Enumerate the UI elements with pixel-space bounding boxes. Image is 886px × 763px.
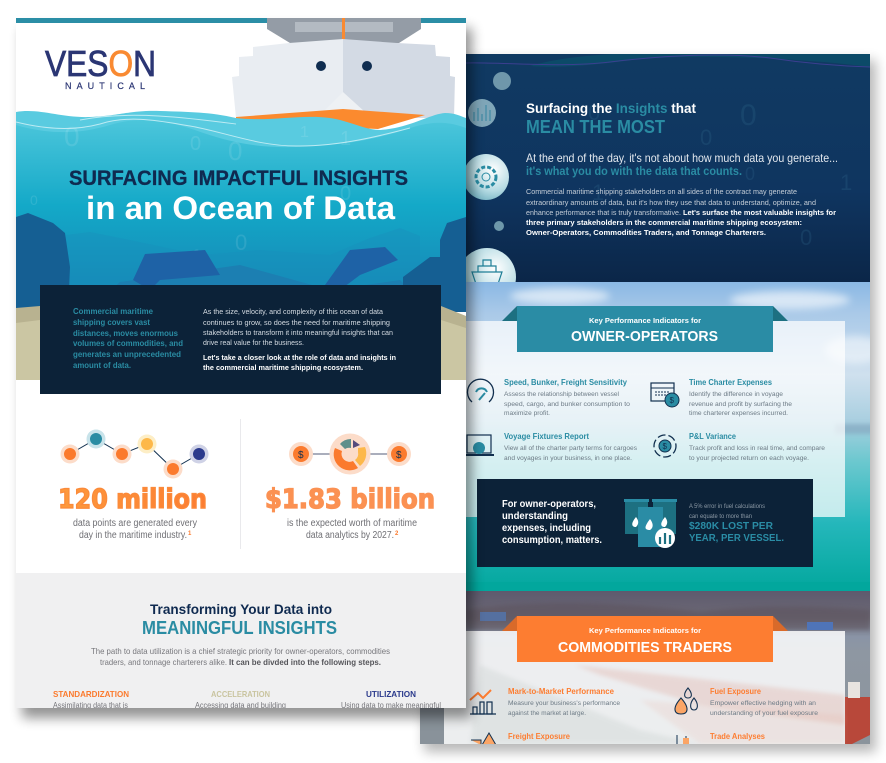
text: path paragraph [91, 647, 390, 667]
title [69, 170, 408, 220]
kpi: trade analyses [676, 733, 765, 744]
callout: owner-operators: consumption, matters. [502, 535, 602, 546]
stat: 1.83 billion: is the expected worth of maritime [287, 518, 417, 529]
text: intro left [73, 307, 183, 370]
text: intro right: the commercial maritime shipping ecosystem. [203, 363, 363, 372]
step: standardization [53, 690, 129, 710]
step: utilization [341, 690, 441, 710]
kpi: mark-to-market performance: Measure your business's performance [508, 700, 620, 707]
logo [44, 50, 154, 90]
icon: oil barrels [624, 499, 677, 548]
icon: laptop gear [464, 435, 494, 455]
kpi: fuel exposure [675, 687, 818, 717]
illustration: sea and rocks [16, 111, 466, 312]
title: SURFACING IMPACTFUL INSIGHTS [69, 167, 408, 190]
kpi: fuel exposure: Fuel Exposure [710, 687, 762, 696]
icon: ship bubble [466, 248, 516, 282]
panel: intro box [40, 285, 441, 394]
icon: small bubble [493, 72, 511, 90]
kpi: time charter expenses: revenue and profit by surfacing the [689, 401, 792, 408]
kpi: p&l variance [654, 432, 825, 462]
text: intro left: shipping covers vast [73, 318, 150, 327]
divider [240, 419, 241, 549]
text: body: enhance performance that is truly transformative. [526, 208, 681, 217]
banner: owner-operators: Key Performance Indicators for [589, 316, 701, 325]
kpi: time charter expenses: Time Charter Expenses [689, 378, 773, 387]
text: body: Let's surface the most valuable insights for [683, 208, 836, 217]
text: intro left: generates an unprecedented [73, 350, 181, 359]
banner: commodities traders: COMMODITIES TRADERS [558, 639, 732, 656]
right page shadow [424, 60, 876, 752]
kpi: speed, bunker, freight sensitivity: Assess the relationship between vessel [504, 391, 619, 398]
text: intro right: continues to grow, so does the need for maritime shipping [203, 318, 390, 327]
panel: surfacing the insights [466, 54, 870, 282]
kpi: p&l variance: Track profit and loss in real time, and compare [689, 445, 825, 452]
left page shadow [22, 28, 472, 718]
panel: commodities traders photo background [420, 591, 870, 745]
text: intro left: Commercial maritime [73, 307, 153, 316]
kpi: trade analyses: Trade Analyses [710, 732, 766, 741]
icon: chart bubble [468, 99, 496, 127]
illustration: sea and rocks: 0 [190, 133, 201, 155]
step: acceleration [195, 690, 286, 710]
heading: surfacing the insights: Surfacing the Insights that [526, 101, 696, 116]
icon: calendar dollar [651, 383, 679, 407]
icon: line chart nodes [60, 430, 208, 478]
text: body: extraordinary amounts of data, but it's how they use that data to understand, optimize, and [526, 198, 816, 207]
icon: dollar cycle [654, 435, 676, 457]
kpi: speed, bunker, freight sensitivity: maximize profit. [504, 410, 550, 417]
illustration: sea and rocks: 0 [64, 121, 80, 152]
heading: transforming: Transforming Your Data into [150, 601, 332, 617]
panel: left page [16, 18, 466, 710]
kpi: mark-to-market performance: against the market at large. [508, 710, 586, 717]
text: intro left: amount of data. [73, 361, 131, 370]
kpi: p&l variance: to your projected return on each voyage. [689, 455, 809, 462]
icon: calendar dollar: $ [670, 396, 674, 405]
stat: 1.83 billion: $1.83 billion [265, 484, 435, 515]
logo: VESON [45, 43, 156, 84]
text: intro right: drive real value for the business. [203, 338, 304, 347]
illustration: ship [232, 18, 455, 129]
text: lead [526, 154, 837, 178]
kpi: speed, bunker, freight sensitivity [468, 378, 630, 417]
callout: owner-operators: expenses, including [502, 523, 591, 534]
kpi: fuel exposure: understanding of your fuel exposure [710, 710, 818, 717]
stat: 120 million: 120 million [58, 484, 207, 515]
panel: surfacing the insights: 0 [740, 99, 757, 132]
kpi: mark-to-market performance [470, 687, 620, 717]
text: body: three primary stakeholders in the commercial maritime shipping ecosystem: [526, 218, 802, 227]
stat: 1.83 billion: 2 [395, 531, 399, 537]
panel: transforming your data [16, 573, 466, 710]
icon: donut with coins: $ [396, 450, 402, 461]
icon: gauge [468, 379, 494, 402]
text: intro right [203, 307, 396, 372]
icon: fuel drops [675, 688, 697, 714]
text: intro left: distances, moves enormous [73, 329, 178, 338]
stat: 120 million: day in the maritime industry. [79, 530, 187, 541]
kpi: time charter expenses: time charterer expenses incurred. [689, 410, 788, 417]
kpi: time charter expenses [651, 378, 792, 417]
kpi: time charter expenses: Identify the difference in voyage [689, 391, 783, 398]
illustration: sea and rocks: 0 [30, 192, 38, 208]
kpi: fuel exposure: Empower effective hedging with an [710, 700, 816, 707]
callout: owner-operators: For owner-operators, [502, 499, 596, 510]
illustration: sea and rocks: 1 [300, 124, 309, 141]
callout: owner-operators: can equate to more than [689, 514, 752, 520]
step: standardization: Assimilating data that is [53, 701, 128, 710]
icon: tiny bubble [494, 221, 504, 231]
text: intro right: Let's take a closer look at the role of data and insights in [203, 353, 396, 362]
kpi: voyage fixtures report: and voyages in your business, in one place. [504, 455, 632, 462]
banner: commodities traders: Key Performance Indicators for [589, 626, 701, 635]
stat: 120 million: 1 [188, 531, 192, 537]
panel: surfacing the insights: 1 [592, 180, 604, 205]
text: intro right: As the size, velocity, and complexity of this ocean of data [203, 307, 384, 316]
step: standardization: STANDARDIZATION [53, 690, 129, 699]
panel: right page [420, 52, 885, 745]
text: body: Owner-Operators, Commodities Traders, and Tonnage Charterers. [526, 228, 766, 237]
heading: meaningful insights: MEANINGFUL INSIGHTS [142, 618, 337, 638]
icon: growth chart [470, 690, 496, 714]
kpi: speed, bunker, freight sensitivity: speed, cargo, and bunker consumption to [504, 401, 630, 408]
icon: gear bubble [463, 154, 509, 200]
text: lead: it's what you do with the data that counts. [526, 164, 742, 178]
kpi: mark-to-market performance: Mark-to-Market Performance [508, 687, 615, 696]
stat: 1.83 billion [265, 434, 435, 541]
panel: surfacing the insights: 0 [800, 225, 812, 250]
callout: owner-operators: understanding [502, 511, 568, 522]
illustration: sea and rocks: 1 [340, 128, 351, 150]
illustration: sea and rocks: 0 [235, 230, 247, 255]
stat: 1.83 billion: data analytics by 2027. [306, 530, 394, 541]
sand [16, 306, 466, 380]
panel: surfacing the insights: 1 [840, 170, 852, 195]
text: body [526, 187, 836, 237]
kpi: voyage fixtures report [464, 432, 638, 462]
heading: mean the most: MEAN THE MOST [526, 117, 665, 137]
icon: dollar cycle: $ [662, 442, 668, 451]
text: intro left: volumes of commodities, and [73, 339, 183, 348]
panel: surfacing the insights: 0 [745, 164, 755, 184]
panel: surfacing the insights: 0 [700, 125, 712, 150]
icon: donut with coins: $ [298, 450, 304, 461]
kpi: speed, bunker, freight sensitivity: Speed, Bunker, Freight Sensitivity [504, 378, 628, 387]
stat: 120 million [58, 430, 208, 541]
kpi: freight exposure [471, 732, 571, 745]
text: path paragraph: It can be divded into the following steps. [229, 658, 381, 667]
step: acceleration: ACCELERATION [211, 690, 270, 699]
banner: owner-operators: OWNER-OPERATORS [571, 328, 718, 345]
callout: owner-operators: A 5% error in fuel calculations [689, 504, 765, 510]
top bar [16, 18, 466, 23]
step: utilization: Using data to make meaningful [341, 701, 441, 710]
logo: NAUTICAL [65, 81, 145, 91]
callout: owner-operators [477, 479, 813, 567]
stat: 120 million: data points are generated every [73, 518, 197, 529]
text: lead: At the end of the day, it's not about how much data you generate... [526, 151, 838, 165]
text: body: Commercial maritime shipping stakeholders on all sides of the contract may generate [526, 187, 797, 196]
step: acceleration: Accessing data and building [195, 701, 286, 710]
callout: owner-operators: $280K LOST PER [689, 520, 773, 532]
illustration: sea and rocks: 0 [228, 136, 242, 166]
banner: commodities traders [502, 616, 788, 662]
kpi: voyage fixtures report: View all of the charter party terms for cargoes [504, 445, 638, 452]
overlay: commodities traders panel [444, 631, 845, 744]
icon: donut with coins [289, 434, 411, 474]
banner: owner-operators [502, 306, 788, 352]
illustration: sea and rocks: 1 [188, 244, 205, 277]
overlay: owner-operators panel [444, 321, 845, 517]
step: utilization: UTILIZATION [366, 690, 416, 699]
title: in an Ocean of Data [86, 190, 395, 226]
panel: owner-operators photo background [466, 282, 870, 591]
illustration: sea and rocks: 0 [340, 183, 351, 205]
text: intro right: stakeholders to transform it into meaningful insights that can [203, 328, 393, 337]
kpi: freight exposure: Freight Exposure [508, 732, 571, 741]
kpi: p&l variance: P&L Variance [689, 432, 737, 441]
text: path paragraph: traders, and tonnage charterers alike. [100, 658, 227, 667]
panel: surfacing the insights: 0 [588, 100, 600, 125]
callout: owner-operators: YEAR, PER VESSEL. [689, 532, 784, 544]
text: path paragraph: The path to data utilization is a chief strategic priority for owner-operators, commodities [91, 647, 390, 656]
kpi: voyage fixtures report: Voyage Fixtures Report [504, 432, 589, 441]
